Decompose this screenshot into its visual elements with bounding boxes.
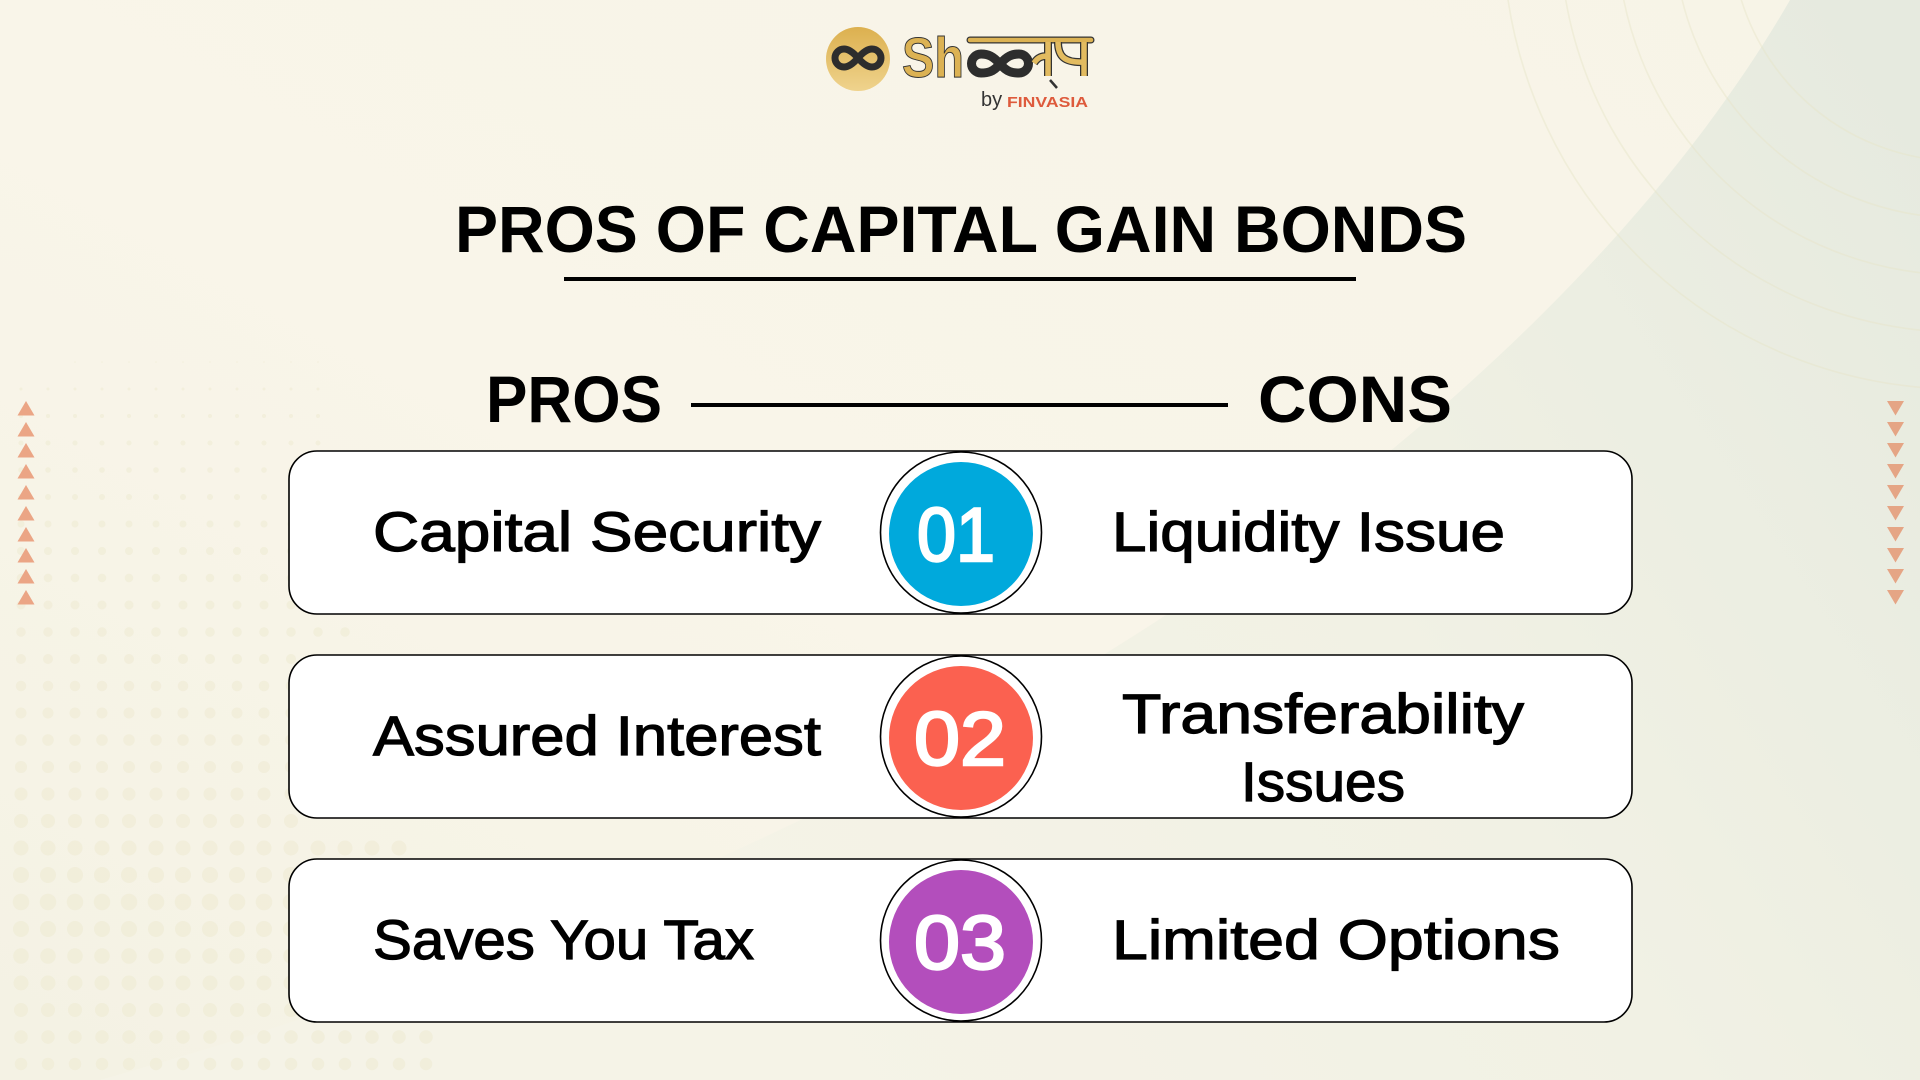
column header: cons: CONS [1258,362,1452,436]
con: transferability issues: Transferability [1122,682,1524,745]
con: transferability issues [1122,682,1524,813]
pro: capital security: Capital Security [373,500,821,563]
panel: row 02 [289,655,1632,818]
number badge 03 [880,860,1042,1021]
logo icon: infinity badge [826,27,890,91]
panel: row 01 [289,451,1632,614]
decorative down arrows, right [1887,401,1904,604]
logo wordmark: Sh: Sh [902,26,964,90]
logo: Shoonya by Finvasia [826,26,1091,111]
panel: row 03 [289,859,1632,1022]
number badge 02 [880,656,1042,817]
number badge 02: 02 [914,697,1006,782]
con: limited options: Limited Options [1112,908,1560,971]
logo byline: by: by [981,89,1002,111]
column header: pros: PROS [486,362,662,436]
number badge 01 [880,452,1042,613]
decorative dot grid [21,362,430,1064]
number badge 03: 03 [914,901,1006,986]
con: liquidity issue: Liquidity Issue [1112,500,1505,563]
header connector line [691,403,1228,407]
pro: saves you tax: Saves You Tax [373,908,754,971]
con: transferability issues: Issues [1241,750,1405,813]
logo byline: Finvasia: FINVASIA [1007,94,1088,111]
decorative up arrows, left [18,401,34,604]
title: PROS OF CAPITAL GAIN BONDS [455,192,1467,266]
title underline [564,277,1356,281]
pro: assured interest: Assured Interest [373,704,821,767]
number badge 01: 01 [917,493,995,578]
logo wordmark: infinity and Devanagari mark [970,40,1091,88]
